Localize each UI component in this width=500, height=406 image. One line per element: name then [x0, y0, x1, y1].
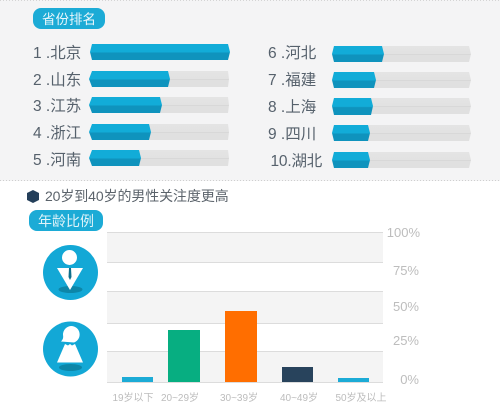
row 3 Jiangsu: 3 .江苏	[33, 97, 81, 115]
x axis labels: 40~49岁	[280, 391, 318, 404]
row 2 Shandong	[33, 71, 229, 89]
row 1 Beijing	[33, 44, 230, 62]
row 4 Zhejiang: 4 .浙江	[33, 124, 81, 142]
subtitle: 20岁到40岁的男性关注度更高	[45, 188, 229, 204]
row 9 Sichuan	[268, 125, 471, 143]
panel: province ranking right column	[268, 44, 471, 170]
x axis labels: 20~29岁	[161, 391, 199, 404]
row 5 Henan	[33, 150, 229, 169]
y axis labels: 75%	[393, 263, 419, 278]
heading: province ranking	[33, 8, 105, 29]
bar: 50+	[338, 378, 369, 382]
y axis labels: 100%	[387, 225, 420, 240]
heading: province ranking: 省份排名	[42, 12, 96, 27]
row 6 Hebei: 6 .河北	[268, 44, 317, 62]
icon: male	[43, 245, 98, 300]
row 8 Shanghai: 8 .上海	[268, 98, 316, 116]
heading: age ratio	[29, 210, 103, 231]
x axis labels: 50岁及以上	[335, 391, 387, 404]
row 3 Jiangsu	[33, 97, 229, 115]
row 4 Zhejiang	[33, 124, 229, 142]
y axis labels: 25%	[393, 333, 419, 348]
row 7 Fujian: 7 .福建	[268, 71, 316, 89]
icon: female	[43, 322, 98, 376]
bar: under 19	[122, 377, 153, 382]
y axis labels: 0%	[400, 372, 419, 387]
row 1 Beijing: 1 .北京	[33, 44, 81, 62]
panel: province ranking left column	[33, 44, 230, 169]
row 10 Hubei: 10.湖北	[270, 152, 323, 170]
heading: age ratio: 年龄比例	[38, 213, 94, 229]
x axis labels: 30~39岁	[220, 391, 258, 404]
icon: hexagon bullet	[27, 190, 39, 203]
bar chart: age distribution	[107, 225, 420, 404]
row 2 Shandong: 2 .山东	[33, 71, 81, 89]
y axis labels: 50%	[393, 299, 419, 314]
bar: 40-49	[282, 367, 313, 382]
x axis labels	[112, 391, 387, 404]
row 7 Fujian	[268, 71, 471, 89]
row 9 Sichuan: 9 .四川	[268, 126, 316, 143]
row 8 Shanghai	[268, 98, 471, 116]
bar: 20-29	[168, 330, 200, 382]
row 6 Hebei	[268, 44, 471, 62]
row 10 Hubei	[270, 152, 471, 170]
bar: 30-39	[225, 311, 257, 382]
row 5 Henan: 5 .河南	[33, 151, 81, 169]
y axis labels	[387, 225, 420, 387]
x axis labels: 19岁以下	[112, 391, 154, 404]
